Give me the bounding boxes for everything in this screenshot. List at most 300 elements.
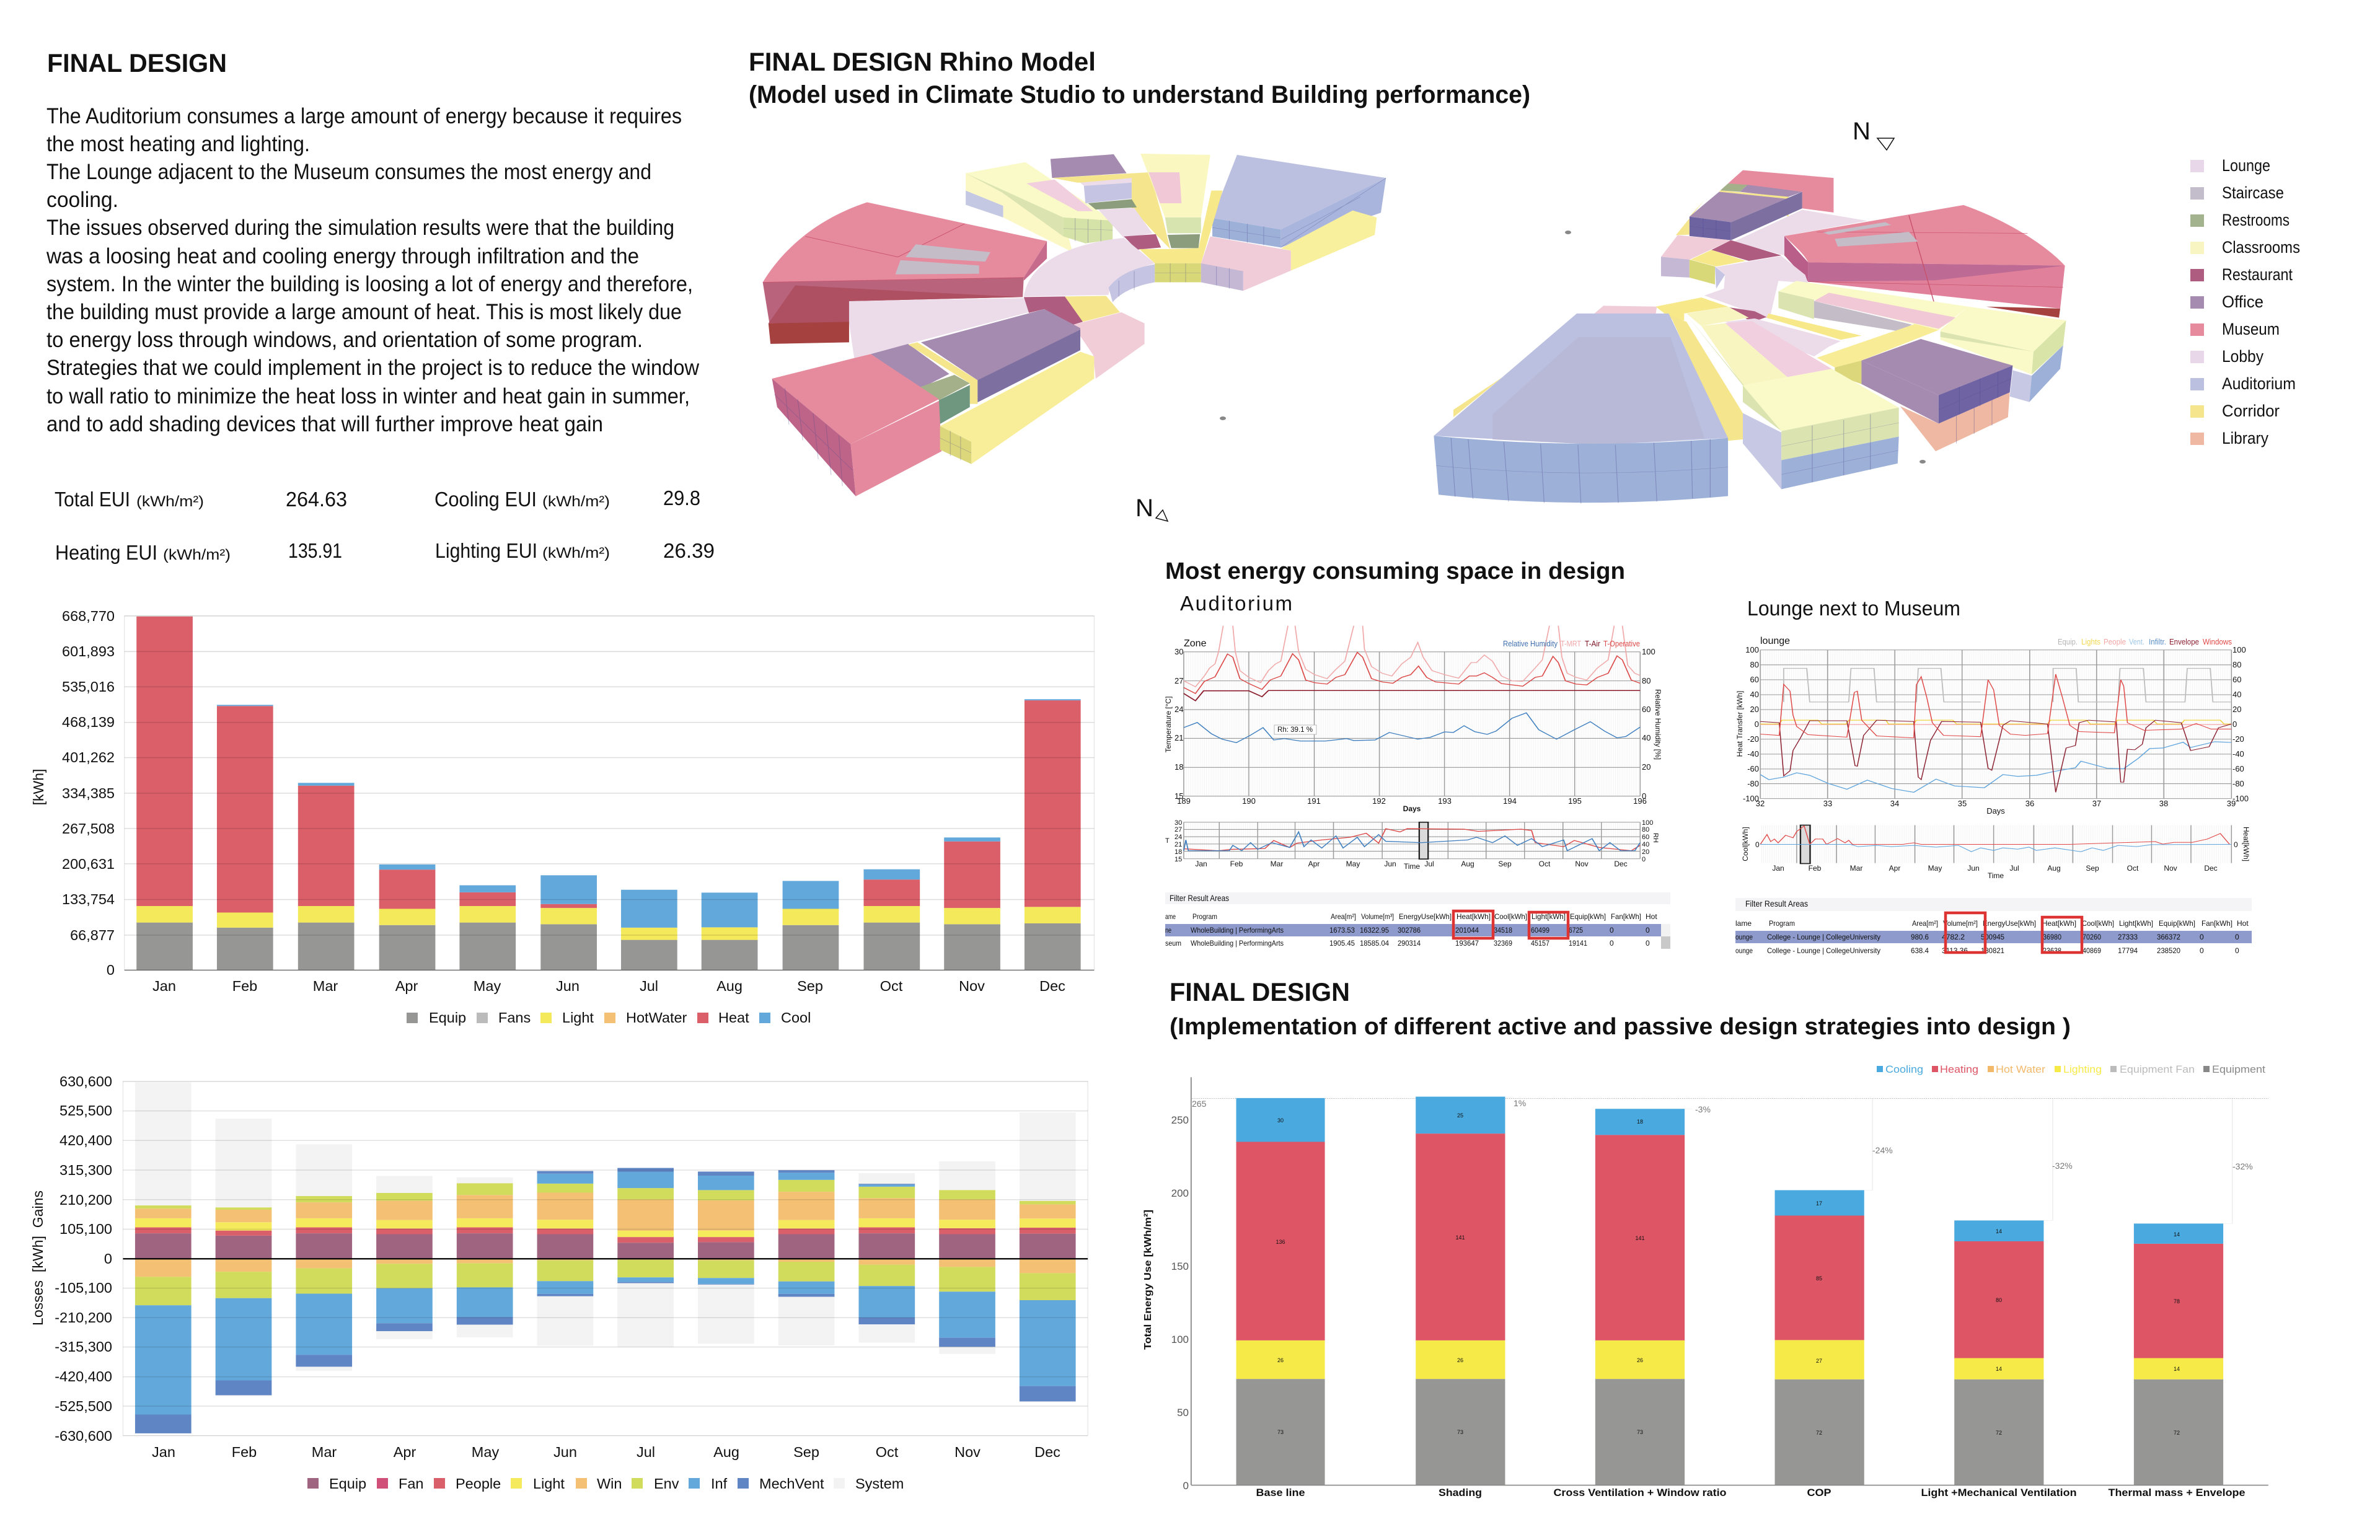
zone: corridor right <box>1280 211 1377 271</box>
tooltip: Rh: 39.1 % <box>1277 725 1313 734</box>
legend: HotWater <box>626 1010 687 1026</box>
y axis labels: 525,500 <box>60 1102 112 1119</box>
series: heating <box>1236 1133 2223 1358</box>
axis labels: 195 <box>1568 796 1582 806</box>
y axis labels: -210,200 <box>55 1309 112 1326</box>
curve: windows <box>1760 674 2231 738</box>
table: auditorium results: Volume[m³] <box>1361 912 1394 921</box>
percent change labels: -32% <box>2052 1161 2073 1171</box>
zone: lower museum <box>772 354 941 496</box>
marker: north arrow two: N <box>1135 495 1153 522</box>
legend: Equip <box>429 1010 466 1026</box>
month labels: Feb <box>232 978 257 994</box>
value labels: 14 <box>1996 1228 2002 1234</box>
series: heat <box>136 617 1081 913</box>
table: auditorium results: 45157 <box>1531 939 1549 948</box>
table: lounge results: 23638 <box>2043 946 2061 955</box>
panel: EUI statistics: Lighting EUI <box>435 539 537 562</box>
line chart: lounge heat transfer <box>1760 650 2231 863</box>
category labels: Cross Ventilation + Window ratio <box>1553 1487 1727 1498</box>
legend: Win <box>597 1476 622 1492</box>
axis labels: 80 <box>1750 660 1759 669</box>
zone: right classroom block <box>1941 307 2066 402</box>
axis labels: Heat Transfer [kWh] <box>1735 691 1744 757</box>
title: final design: FINAL DESIGN <box>47 48 227 77</box>
y axis labels: 601,893 <box>62 643 115 659</box>
y axis labels: -420,400 <box>55 1368 112 1384</box>
y axis labels: 100 <box>1171 1334 1189 1345</box>
value labels: 85 <box>1816 1275 1822 1282</box>
zone: auditorium <box>1212 155 1386 247</box>
axis labels: 15 <box>1175 791 1183 801</box>
value labels: 73 <box>1637 1429 1643 1435</box>
value labels: 141 <box>1455 1234 1465 1241</box>
curve: annual heat <box>1760 826 2231 844</box>
value labels: 26 <box>1457 1357 1463 1363</box>
table: lounge results: College - Lounge | CollegeUniversity <box>1767 946 1880 955</box>
bar chart plot: strategies <box>1191 1077 2268 1485</box>
month labels: Dec <box>1039 978 1065 994</box>
axis labels: Days <box>1403 804 1421 813</box>
y axis labels: 210,200 <box>60 1192 112 1208</box>
y axis labels: 200,631 <box>62 856 115 872</box>
table: lounge results: 0 <box>2200 946 2204 955</box>
zone: pink lobby <box>1201 237 1291 291</box>
curve: T-Air <box>1184 690 1640 701</box>
table: auditorium results: Area[m²] <box>1331 912 1356 921</box>
curve: T-Operative <box>1184 653 1640 693</box>
table: lounge results: Area[m²] <box>1912 919 1938 928</box>
table: lounge results: Fan[kWh] <box>2202 919 2232 928</box>
panel: monthly gains and losses bar chart <box>30 1073 1088 1492</box>
chart legend: T-MRT <box>1561 639 1581 648</box>
category labels: Thermal mass + Envelope <box>2109 1487 2245 1498</box>
curve: T-MRT <box>1184 626 1640 687</box>
y axis labels: 105,100 <box>60 1221 112 1237</box>
zone: front office <box>1861 339 2012 424</box>
zone: upper lounge <box>1026 180 1093 211</box>
zone: large museum <box>763 202 1047 344</box>
axis labels: 100 <box>1642 647 1655 656</box>
panel: EUI statistics: (kWh/m²) <box>542 493 610 510</box>
zone: main office <box>1690 191 1802 240</box>
y axis labels: 535,016 <box>62 679 115 695</box>
zone: pink room <box>1661 235 1731 260</box>
axis labels: Zone <box>1184 638 1207 649</box>
month labels: Jun <box>553 1444 577 1460</box>
month labels: Jan <box>152 978 176 994</box>
subheading: lounge: Lounge next to Museum <box>1747 597 1960 620</box>
table: lounge results: 3113.36 <box>1942 946 1968 955</box>
annual chart labels: Aug <box>2047 864 2061 873</box>
legend: Heating <box>1940 1063 1978 1075</box>
month labels: Mar <box>313 978 338 994</box>
annual chart labels: 20 <box>1642 848 1649 856</box>
month labels: Apr <box>395 978 418 994</box>
axis labels: 35 <box>1958 799 1967 808</box>
value labels: 18 <box>1637 1119 1643 1125</box>
y axis labels: 315,300 <box>60 1162 112 1178</box>
heading: rhino model: FINAL DESIGN Rhino Model <box>749 47 1096 76</box>
y axis labels: 468,139 <box>62 714 115 730</box>
diagram: rhino model view one <box>763 154 1386 496</box>
table: auditorium results: 0 <box>1610 939 1614 948</box>
annual chart labels: 0 <box>1642 856 1646 863</box>
annual chart labels: 30 <box>1175 819 1182 827</box>
heading: implementation of strategies: FINAL DESIGN <box>1170 977 1350 1006</box>
value labels: 73 <box>1457 1429 1463 1435</box>
bar chart plot: gains and losses <box>123 1081 1088 1436</box>
table: lounge results: Cool[kWh] <box>2082 919 2114 928</box>
table: auditorium results: Equip[kWh] <box>1570 912 1606 921</box>
zone: restaurant <box>1024 296 1083 325</box>
text block: design description: The Lounge adjacent to the Museum consumes the most energy and <box>46 160 651 184</box>
curve: equipment <box>1784 669 2231 702</box>
category labels: Base line <box>1256 1487 1305 1498</box>
y axis labels: 0 <box>104 1251 112 1267</box>
annual chart labels: Jan <box>1772 864 1784 873</box>
table: auditorium results: 302786 <box>1398 926 1421 935</box>
percent change labels: -32% <box>2232 1161 2253 1171</box>
annual chart labels: 21 <box>1175 841 1182 848</box>
legend: MechVent <box>759 1476 824 1492</box>
series: system <box>135 1082 1076 1402</box>
annual chart labels: 60 <box>1642 834 1649 841</box>
table: lounge results: Light[kWh] <box>2119 919 2153 928</box>
curve: annual temperature <box>1184 829 1640 851</box>
line chart: auditorium temperature and humidity <box>1184 626 1640 859</box>
table: auditorium results: Heat[kWh] <box>1457 912 1491 921</box>
value labels: 78 <box>2174 1298 2180 1305</box>
y axis labels <box>62 608 115 978</box>
axis labels: 21 <box>1175 733 1183 742</box>
zone: corridor core <box>1691 250 1746 266</box>
y axis labels: 50 <box>1177 1407 1189 1419</box>
axis labels: 20 <box>1642 762 1651 772</box>
axis labels: -60 <box>1747 764 1759 773</box>
table: lounge results: lame <box>1735 919 1752 928</box>
text block: design description: the building must provide a large amount of heat. This is most likely due <box>46 300 682 324</box>
legend: program zones: Classrooms <box>2222 238 2300 257</box>
curve: annual humidity <box>1184 832 1640 851</box>
legend: program zones: Library <box>2222 429 2268 447</box>
value labels: 14 <box>1996 1366 2002 1372</box>
annual chart labels: T <box>1165 837 1170 845</box>
annual chart labels: Heat[kWh] <box>2242 827 2250 861</box>
icon: view specks <box>1220 231 1926 464</box>
value labels: 26 <box>1637 1357 1643 1363</box>
annual chart labels: 0 <box>1755 840 1760 849</box>
table: auditorium results: 16322.95 <box>1360 926 1389 935</box>
zone: side corridor <box>1670 315 1743 441</box>
axis labels: 0 <box>1642 791 1646 801</box>
curve: infiltration <box>1760 742 2231 792</box>
month labels <box>152 978 1065 994</box>
zone: upper office <box>1051 154 1127 178</box>
axis labels: 0 <box>2232 719 2237 729</box>
zone: office top <box>1740 185 1802 197</box>
y axis labels: 150 <box>1171 1261 1189 1272</box>
month labels: Sep <box>797 978 823 994</box>
diagram: rhino model view two <box>1434 170 2066 504</box>
axis labels: 30 <box>1175 647 1183 656</box>
month labels: Aug <box>713 1444 739 1460</box>
zone: small restaurant <box>1124 234 1161 250</box>
table: auditorium results: 18585.04 <box>1360 939 1389 948</box>
table: lounge results: 638.4 <box>1911 946 1929 955</box>
axis labels: Days <box>1986 806 2005 816</box>
legend <box>307 1476 904 1492</box>
series: cool <box>217 699 1081 928</box>
axis labels <box>1735 636 2249 816</box>
axis labels: 193 <box>1438 796 1452 806</box>
legend: Light <box>533 1476 565 1492</box>
table: auditorium results: 1673.53 <box>1329 926 1355 935</box>
panel: EUI statistics: 29.8 <box>663 486 700 509</box>
table: auditorium results: 0 <box>1646 939 1650 948</box>
value labels: 26 <box>1277 1357 1284 1363</box>
annual chart labels: 15 <box>1175 856 1182 863</box>
annual chart labels: Sep <box>2086 864 2099 873</box>
axis labels: 60 <box>1750 675 1759 684</box>
y axis labels: 66,877 <box>70 927 115 943</box>
table: auditorium results: 290314 <box>1398 939 1421 948</box>
zone: pink arc <box>1593 306 1657 315</box>
panel: EUI statistics <box>55 486 715 564</box>
y axis labels: -315,300 <box>55 1339 112 1355</box>
series: infiltration <box>135 1172 1076 1415</box>
heading: implementation of strategies <box>1170 977 2071 1040</box>
legend: program zones: Auditorium <box>2222 374 2296 393</box>
table: lounge results: ounge <box>1735 946 1753 955</box>
curve: people <box>1760 724 2231 726</box>
table: lounge results <box>1735 898 2252 955</box>
zone: inner ring facade <box>1661 257 1725 289</box>
axis labels: -40 <box>1747 749 1759 759</box>
value labels: 25 <box>1457 1112 1463 1119</box>
text block: design description: to energy loss through windows, and orientation of some program. <box>46 328 643 352</box>
chart legend: Equip. <box>2058 637 2078 646</box>
y axis labels: 0 <box>1183 1480 1189 1492</box>
value labels: 30 <box>1277 1117 1284 1124</box>
table: auditorium results: Program <box>1192 912 1217 921</box>
table: lounge results: ounge <box>1735 933 1753 941</box>
series: equip <box>135 1233 1076 1259</box>
month labels: Aug <box>716 978 743 994</box>
axis labels: -80 <box>1747 779 1759 788</box>
table: auditorium results <box>1165 892 1670 949</box>
table: lounge results: Filter Result Areas <box>1745 899 1808 909</box>
table: auditorium results: Fan[kWh] <box>1611 912 1641 921</box>
panel: EUI statistics: 264.63 <box>286 488 347 511</box>
legend: Cool <box>781 1010 811 1026</box>
month labels: Jul <box>640 978 658 994</box>
panel: EUI statistics: Cooling EUI <box>434 488 537 511</box>
legend: Equipment <box>2212 1063 2265 1075</box>
table: lounge results: EnergyUse[kWh] <box>1983 919 2036 928</box>
table: lounge results: 17794 <box>2118 946 2138 955</box>
marker: north arrow two <box>1135 495 1168 522</box>
legend: program zones <box>2190 156 2300 447</box>
series: light <box>135 1218 1076 1237</box>
panel: auditorium <box>1164 592 1670 949</box>
legend: Equip <box>329 1476 366 1492</box>
month labels: Feb <box>232 1444 257 1460</box>
zone: restaurant <box>1711 240 1781 261</box>
axis labels: 34 <box>1890 799 1899 808</box>
annual chart labels: Jul <box>2009 864 2019 873</box>
y axis labels <box>55 1073 112 1444</box>
axis labels: 100 <box>1745 645 1759 654</box>
marker: north arrow one <box>1853 118 1894 150</box>
annual chart labels: Feb <box>1809 864 1822 873</box>
panel: EUI statistics: (kWh/m²) <box>163 547 231 563</box>
legend <box>1877 1063 2265 1075</box>
month labels: May <box>472 1444 499 1460</box>
zone: large lounge <box>849 298 1029 358</box>
legend: program zones: Restrooms <box>2222 211 2290 229</box>
y axis labels: 133,754 <box>62 891 115 907</box>
axis labels: 32 <box>1756 799 1765 808</box>
y axis title: [kWh] <box>30 769 46 805</box>
panel: EUI statistics: 26.39 <box>663 539 715 562</box>
chart legend: T-Operative <box>1603 639 1640 648</box>
annual chart labels <box>1165 819 1659 871</box>
table: lounge results: Hot <box>2237 919 2249 928</box>
heading: rhino model <box>749 47 1530 108</box>
zone: restaurant small <box>1729 307 1766 322</box>
legend: Heat <box>718 1010 749 1026</box>
table: lounge results: 980.6 <box>1911 933 1929 941</box>
text block: design description: system. In the winter the building is loosing a lot of energy and therefore, <box>46 272 693 296</box>
chart legend: Relative Humidity <box>1503 639 1558 648</box>
axis labels: -100 <box>2232 794 2249 803</box>
table: auditorium results: EnergyUse[kWh] <box>1399 912 1452 921</box>
series: equip <box>136 923 1081 970</box>
axis labels: 20 <box>1750 705 1759 714</box>
text block: design description: the most heating and lighting. <box>46 132 310 156</box>
text block: design description: The Auditorium consumes a large amount of energy because it requires <box>46 104 682 128</box>
percent change labels: -24% <box>1872 1145 1893 1155</box>
y axis labels: 334,385 <box>62 785 115 801</box>
percent change labels: 1% <box>1514 1098 1526 1108</box>
table: lounge results: 180821 <box>1981 946 2004 955</box>
legend <box>407 1010 811 1026</box>
value labels: 14 <box>2174 1366 2180 1372</box>
month labels: Jan <box>152 1444 175 1460</box>
text block: design description: The issues observed during the simulation results were that the building <box>46 216 674 240</box>
y axis labels: 250 <box>1171 1114 1189 1126</box>
zone: upper lobby <box>1080 178 1132 186</box>
axis labels: 60 <box>1642 705 1651 714</box>
heading: most energy consuming space: Most energy consuming space in design <box>1165 558 1625 584</box>
value labels: 27 <box>1816 1358 1822 1364</box>
legend: program zones: Museum <box>2222 320 2280 338</box>
annual chart labels: May <box>1928 864 1942 873</box>
annual chart labels: Nov <box>1575 860 1589 868</box>
category labels: Shading <box>1439 1487 1482 1498</box>
zone: restroom <box>1088 199 1137 209</box>
zone: tall classroom <box>1140 154 1210 248</box>
month labels: Jun <box>556 978 580 994</box>
category labels: Light +Mechanical Ventilation <box>1921 1487 2076 1498</box>
series: windows <box>135 1192 1076 1277</box>
axis labels: -20 <box>2232 734 2244 744</box>
value labels: 14 <box>2174 1231 2180 1238</box>
legend: program zones: Lobby <box>2222 347 2263 366</box>
table: lounge results: 0 <box>2235 946 2239 955</box>
annual chart labels: Jun <box>1384 860 1396 868</box>
axis labels: 38 <box>2159 799 2168 808</box>
annual chart labels <box>1741 827 2250 880</box>
annual chart labels: Time <box>1404 862 1420 871</box>
panel: EUI statistics: (kWh/m²) <box>542 545 610 561</box>
annual chart labels: 0 <box>2234 840 2238 849</box>
annual chart labels: Jan <box>1195 860 1207 868</box>
y axis labels: 0 <box>107 962 115 978</box>
table: auditorium results: 34518 <box>1494 926 1512 935</box>
annual chart labels: 100 <box>1642 819 1653 827</box>
month labels: Apr <box>394 1444 416 1460</box>
panel: EUI statistics: Total EUI <box>55 488 130 511</box>
chart legend: People <box>2104 637 2126 646</box>
annual chart labels: Apr <box>1889 864 1900 873</box>
axis labels: 60 <box>2232 675 2241 684</box>
zone: staircase grid <box>1084 183 1132 203</box>
axis labels <box>1164 638 1662 813</box>
table: auditorium results: ne <box>1165 926 1171 935</box>
axis labels: 194 <box>1503 796 1517 806</box>
value labels: 73 <box>1277 1429 1284 1435</box>
zone: library <box>1900 392 2010 451</box>
table: lounge results: Volume[m²] <box>1943 919 1978 928</box>
zone: top museum <box>1728 170 1833 213</box>
legend: program zones: Lounge <box>2222 156 2270 175</box>
legend: Lighting <box>2063 1063 2102 1075</box>
axis labels: 24 <box>1175 705 1183 714</box>
table: auditorium results: 193647 <box>1455 939 1479 948</box>
table: auditorium results: ame <box>1165 912 1176 921</box>
axis labels: 20 <box>2232 705 2241 714</box>
table: lounge results: 27333 <box>2118 933 2138 941</box>
table: lounge results: Program <box>1769 919 1795 928</box>
annual chart labels: Aug <box>1461 860 1474 868</box>
zone: corridor short <box>1766 314 1861 340</box>
table: lounge results: 0 <box>2235 933 2239 941</box>
legend: Cooling <box>1885 1063 1923 1075</box>
table: lounge results: College - Lounge | CollegeUniversity <box>1767 933 1880 941</box>
axis labels: 80 <box>2232 660 2241 669</box>
percent change labels: -3% <box>1695 1104 1711 1114</box>
chart legend: Windows <box>2203 637 2232 646</box>
table: auditorium results: WholeBuilding | PerformingArts <box>1191 939 1284 948</box>
annual chart labels: 24 <box>1175 834 1182 841</box>
month labels: Jul <box>637 1444 655 1460</box>
zone: auditorium <box>1434 314 1728 504</box>
value labels: 72 <box>1816 1430 1822 1436</box>
axis labels: 0 <box>1755 719 1759 729</box>
axis labels: 33 <box>1823 799 1832 808</box>
table: lounge results: 0 <box>2200 933 2204 941</box>
table: lounge results: Heat[kWh] <box>2042 919 2076 928</box>
chart legend: Envelope <box>2169 637 2199 646</box>
table: auditorium results: Hot <box>1646 912 1657 921</box>
zone: restroom <box>1721 183 1748 191</box>
zone: upper corridor <box>1052 172 1170 249</box>
y axis labels: -525,500 <box>55 1398 112 1414</box>
legend: Equipment Fan <box>2120 1063 2195 1075</box>
zone: lower corridor <box>940 352 1094 464</box>
